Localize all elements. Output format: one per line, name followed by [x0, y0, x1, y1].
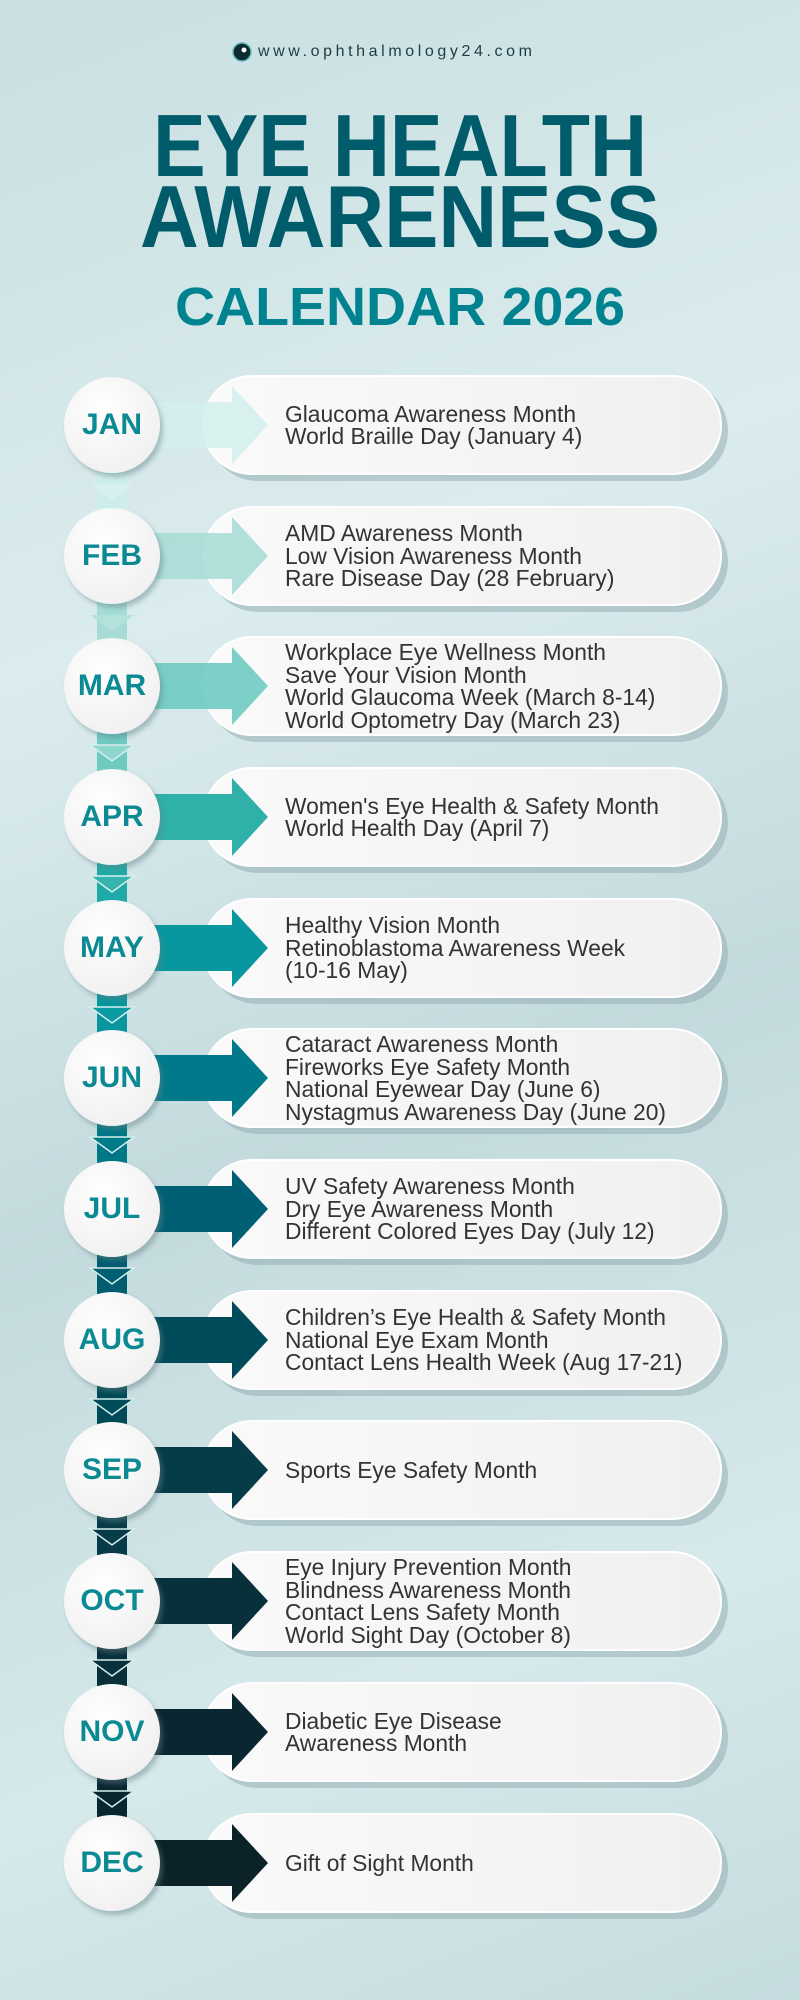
row: DEC	[64, 1813, 728, 1919]
row: JUN: Nystagmus Awareness Day (June 20)	[285, 1098, 666, 1124]
row: NOV: Awareness Month	[285, 1730, 467, 1756]
title: EYE HEALTH	[153, 96, 647, 195]
row: JUL: UV Safety Awareness Month	[285, 1173, 575, 1199]
row: APR	[64, 767, 728, 873]
row: MAR: Save Your Vision Month	[285, 662, 527, 688]
row: SEP: SEP	[82, 1453, 142, 1486]
row: AUG: Contact Lens Health Week (Aug 17-21)	[285, 1349, 682, 1375]
row: MAR: Workplace Eye Wellness Month	[285, 639, 606, 665]
row: APR: Women's Eye Health & Safety Month	[285, 792, 659, 818]
row: FEB: FEB	[82, 539, 142, 572]
row: NOV: Diabetic Eye Disease	[285, 1708, 502, 1734]
row: JUL: JUL	[84, 1192, 140, 1225]
row: OCT	[64, 1551, 728, 1657]
icon: eye logo	[232, 42, 252, 62]
row: OCT: Contact Lens Safety Month	[285, 1599, 560, 1625]
row: FEB: Low Vision Awareness Month	[285, 543, 582, 569]
row: AUG	[64, 1290, 728, 1396]
row: MAY	[64, 898, 728, 1004]
row: FEB: Rare Disease Day (28 February)	[285, 565, 614, 591]
row: SEP: Sports Eye Safety Month	[285, 1457, 537, 1483]
row: APR: World Health Day (April 7)	[285, 815, 549, 841]
row: MAY: Retinoblastoma Awareness Week	[285, 935, 625, 961]
title: CALENDAR 2026	[175, 277, 625, 337]
row: JAN	[64, 375, 728, 481]
row: NOV: NOV	[79, 1715, 144, 1748]
row: JUL: Dry Eye Awareness Month	[285, 1196, 553, 1222]
row: SEP	[64, 1420, 728, 1526]
row: MAY: Healthy Vision Month	[285, 912, 500, 938]
row: JUN	[64, 1028, 728, 1134]
row: AUG: AUG	[79, 1323, 145, 1356]
row: MAY: MAY	[80, 931, 144, 964]
row: AUG: National Eye Exam Month	[285, 1327, 549, 1353]
row: OCT: OCT	[80, 1584, 144, 1617]
row: JUN: JUN	[82, 1061, 142, 1094]
title: AWARENESS	[140, 167, 660, 266]
row: FEB: AMD Awareness Month	[285, 520, 523, 546]
row: JAN: World Braille Day (January 4)	[285, 423, 582, 449]
row: AUG: Children’s Eye Health & Safety Month	[285, 1304, 666, 1330]
row: JUN: National Eyewear Day (June 6)	[285, 1076, 601, 1102]
row: MAR	[64, 636, 728, 742]
title	[140, 96, 660, 337]
row: MAR: World Glaucoma Week (March 8-14)	[285, 684, 655, 710]
row: MAR: MAR	[78, 669, 146, 702]
row: OCT: Eye Injury Prevention Month	[285, 1554, 571, 1580]
row: MAY: (10-16 May)	[285, 957, 408, 983]
row: MAR: World Optometry Day (March 23)	[285, 706, 620, 732]
row: OCT: Blindness Awareness Month	[285, 1576, 571, 1602]
row: DEC: DEC	[80, 1846, 144, 1879]
website url: www.ophthalmology24.com	[258, 43, 536, 60]
row: JUN: Cataract Awareness Month	[285, 1031, 558, 1057]
row: APR: APR	[80, 800, 144, 833]
row: OCT: World Sight Day (October 8)	[285, 1622, 571, 1648]
row: FEB	[64, 506, 728, 612]
row: DEC: Gift of Sight Month	[285, 1850, 474, 1876]
row: JUN: Fireworks Eye Safety Month	[285, 1054, 570, 1080]
row: JAN: JAN	[82, 408, 142, 441]
row: NOV	[64, 1682, 728, 1788]
row: JAN: Glaucoma Awareness Month	[285, 400, 576, 426]
row: JUL	[64, 1159, 728, 1265]
row: JUL: Different Colored Eyes Day (July 12)	[285, 1218, 655, 1244]
